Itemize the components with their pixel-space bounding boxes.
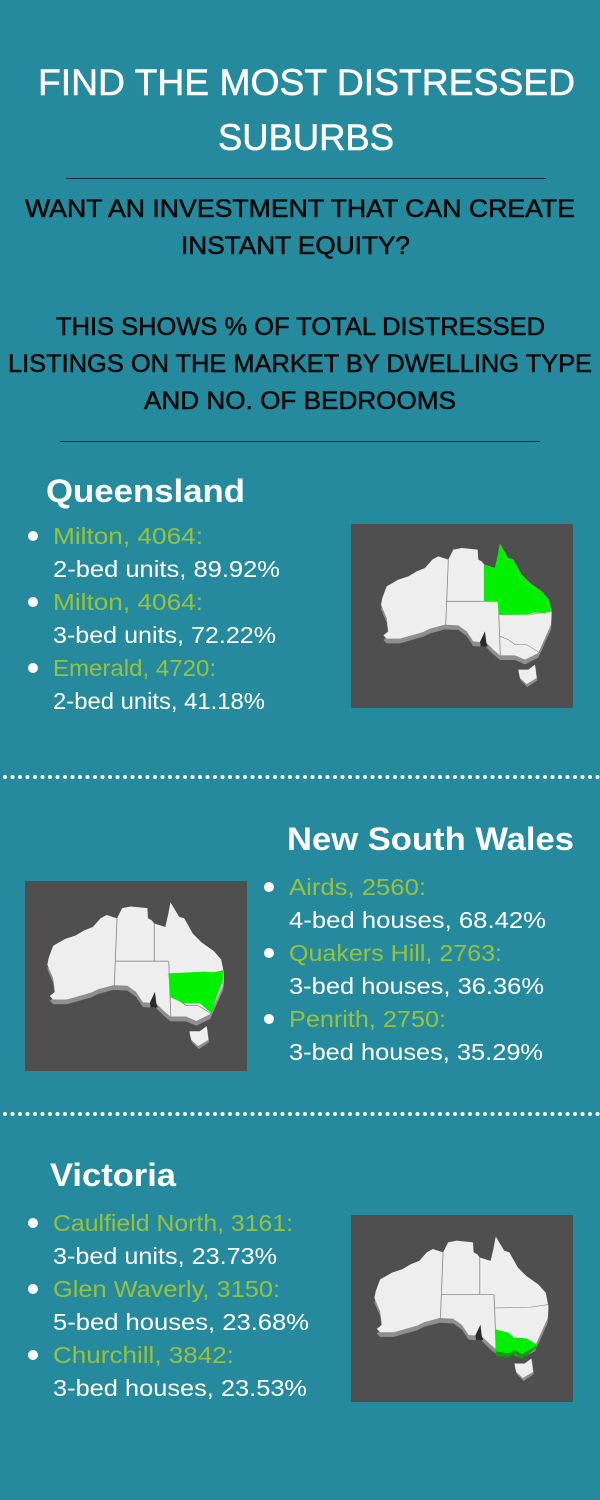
heading: Victoria: Victoria [50, 1157, 176, 1193]
description text: THIS SHOWS % OF TOTAL DISTRESSED [56, 313, 545, 341]
list: Queensland suburbs [28, 523, 280, 714]
list: New South Wales suburbs: Penrith, 2750: [289, 1006, 446, 1032]
title [38, 62, 575, 158]
list: Queensland suburbs: Milton, 4064: [53, 523, 203, 549]
list: New South Wales suburbs: 3-bed houses, 36.36% [289, 973, 544, 999]
list: Victoria suburbs: Churchill, 3842: [53, 1342, 234, 1368]
description text: AND NO. OF BEDROOMS [144, 387, 456, 415]
list: Queensland suburbs: 2-bed units, 41.18% [53, 688, 265, 714]
list: New South Wales suburbs [264, 874, 546, 1065]
heading: Queensland: Queensland [46, 473, 245, 509]
list: New South Wales suburbs: Airds, 2560: [289, 874, 426, 900]
list: Queensland suburbs: 3-bed units, 72.22% [53, 622, 276, 648]
divider: dotted [5, 775, 600, 779]
list: Victoria suburbs: Caulfield North, 3161: [53, 1210, 293, 1236]
list: Victoria suburbs: 3-bed houses, 23.53% [53, 1375, 307, 1401]
panel: Queensland [28, 473, 573, 714]
list: Victoria suburbs [28, 1210, 309, 1401]
panel: Victoria [28, 1157, 573, 1402]
subtitle: investment question [25, 195, 575, 260]
map: Queensland highlighted [351, 524, 573, 708]
title: FIND THE MOST DISTRESSED [38, 62, 575, 103]
title: SUBURBS [218, 117, 394, 158]
list: Victoria suburbs: 3-bed units, 23.73% [53, 1243, 277, 1269]
panel: New South Wales [25, 821, 574, 1071]
list: New South Wales suburbs: Quakers Hill, 2763: [289, 940, 502, 966]
map: New South Wales highlighted [25, 881, 247, 1071]
description text: LISTINGS ON THE MARKET BY DWELLING TYPE [8, 350, 592, 378]
list: New South Wales suburbs: 4-bed houses, 68.42% [289, 907, 546, 933]
list: Queensland suburbs: Emerald, 4720: [53, 655, 216, 681]
list: Queensland suburbs: 2-bed units, 89.92% [53, 556, 280, 582]
description text [8, 313, 592, 415]
map: Victoria highlighted [351, 1215, 573, 1402]
list: Victoria suburbs: 5-bed houses, 23.68% [53, 1309, 309, 1335]
subtitle: investment question: INSTANT EQUITY? [181, 232, 410, 260]
subtitle: investment question: WANT AN INVESTMENT THAT CAN CREATE [25, 195, 575, 223]
list: Victoria suburbs: Glen Waverly, 3150: [53, 1276, 280, 1302]
heading: New South Wales: New South Wales [287, 821, 574, 857]
divider: dotted [5, 1112, 600, 1116]
list: Queensland suburbs: Milton, 4064: [53, 589, 203, 615]
list: New South Wales suburbs: 3-bed houses, 35.29% [289, 1039, 543, 1065]
